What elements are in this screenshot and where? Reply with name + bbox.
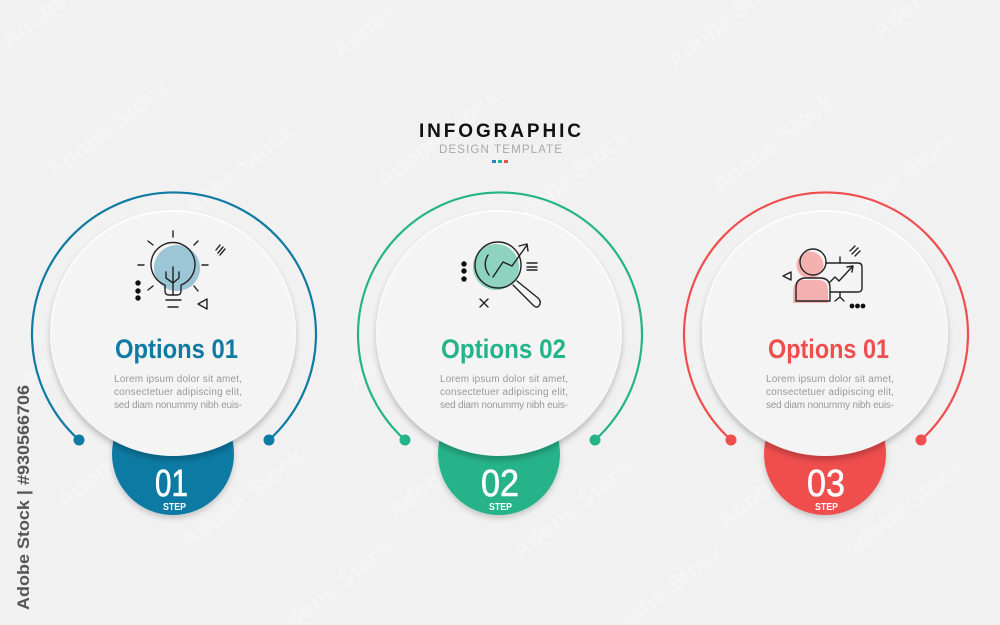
- colour dots: [492, 160, 508, 163]
- card circle: [702, 210, 948, 456]
- watermark pattern: Adobe Stock: [177, 443, 310, 555]
- heading: options 01: Options 01: [115, 334, 238, 364]
- ring arc: [684, 192, 968, 440]
- heading: options 01: Options 01: [768, 334, 889, 364]
- body text: consectetuer adipiscing elit,: [440, 387, 568, 398]
- step label: 03: [807, 463, 845, 505]
- card circle: [376, 210, 622, 456]
- ring end dots: [400, 434, 600, 446]
- body text: sed diam nonummy nibh euis-: [766, 400, 894, 411]
- heading: INFOGRAPHIC: [419, 121, 581, 142]
- ring arc: [32, 192, 316, 440]
- watermark pattern: Adobe Stock: [342, 283, 475, 395]
- body text: [114, 374, 242, 411]
- watermark pattern: Adobe Stock: [167, 118, 300, 230]
- watermark pattern: Adobe Stock: [42, 73, 175, 185]
- watermark pattern: Adobe Stock: [507, 453, 640, 565]
- watermark pattern: Adobe Stock: [502, 123, 635, 235]
- watermark pattern: Adobe Stock: [372, 83, 505, 195]
- body text: sed diam nonummy nibh euis-: [114, 400, 242, 411]
- body text: consectetuer adipiscing elit,: [114, 387, 242, 398]
- step label: STEP: [815, 502, 838, 513]
- watermark pattern: Adobe Stock: [17, 283, 150, 395]
- body text: consectetuer adipiscing elit,: [766, 387, 894, 398]
- step badge: [764, 393, 886, 515]
- subheading: DESIGN TEMPLATE: [439, 144, 562, 156]
- icon: magnifier with chart: [461, 242, 540, 307]
- step badge: [112, 393, 234, 515]
- step badge: [438, 393, 560, 515]
- body text: [440, 374, 568, 411]
- body text: Lorem ipsum dolor sit amet,: [766, 374, 894, 385]
- body text: sed diam nonummy nibh euis-: [440, 400, 568, 411]
- watermark pattern: Adobe Stock: [837, 453, 970, 565]
- step label: STEP: [489, 502, 512, 513]
- watermark pattern: Adobe Stock: [707, 88, 840, 200]
- ring end dots: [74, 434, 274, 446]
- step label: 01: [155, 463, 188, 505]
- step label: STEP: [163, 502, 186, 513]
- panel: option 1: [32, 192, 316, 515]
- watermark pattern: Adobe Stock: [672, 283, 805, 395]
- panel: option 3: [684, 192, 968, 515]
- watermark pattern: Adobe Stock: [712, 423, 845, 535]
- ring end dots: [726, 434, 926, 446]
- body text: Lorem ipsum dolor sit amet,: [114, 374, 242, 385]
- step label: 02: [481, 463, 519, 505]
- panel: option 2: [358, 192, 642, 515]
- heading: options 02: Options 02: [441, 334, 566, 364]
- body text: [766, 374, 894, 411]
- ring arc: [358, 192, 642, 440]
- watermark pattern: Adobe Stock: [382, 413, 515, 525]
- stock credit: Adobe Stock | #930566706: [14, 385, 33, 610]
- icon: light bulb: [135, 231, 225, 309]
- body text: Lorem ipsum dolor sit amet,: [440, 374, 568, 385]
- watermark pattern: Adobe Stock: [52, 403, 185, 515]
- card circle: [50, 210, 296, 456]
- title: [419, 121, 581, 163]
- watermark pattern: Adobe Stock: [832, 123, 965, 235]
- step label: [155, 463, 188, 513]
- icon: presenter with chart board: [783, 246, 865, 308]
